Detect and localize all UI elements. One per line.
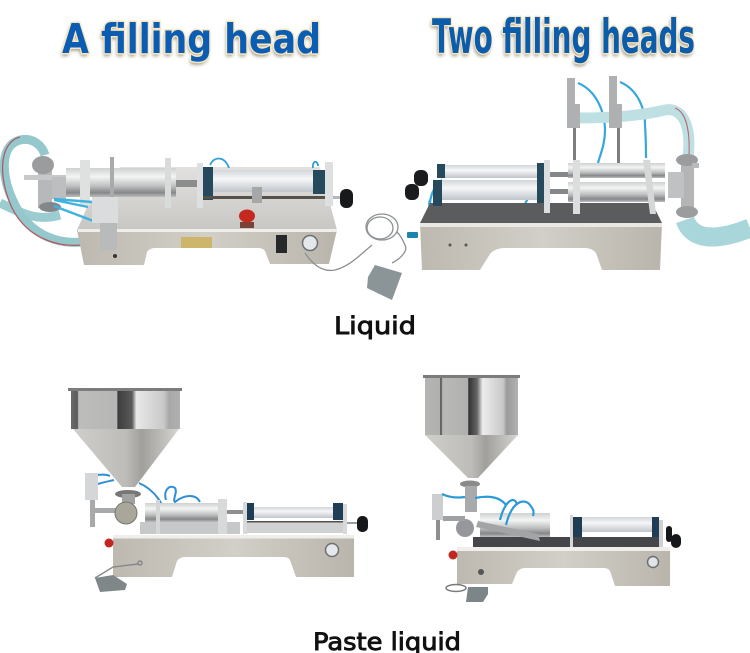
- side nozzle: [85, 473, 119, 527]
- foot pedal: [466, 587, 488, 602]
- nozzle air hoses: [429, 82, 646, 215]
- power switch: [276, 235, 287, 253]
- paste valve: [115, 490, 141, 524]
- pedal cable coil: [446, 584, 466, 592]
- emergency stop: [104, 538, 114, 548]
- lower teal hoses: [685, 220, 750, 237]
- paste cylinder: [140, 499, 243, 534]
- filling nozzle: [54, 197, 118, 258]
- heading: A filling head: A filling head: [62, 15, 321, 63]
- pressure gauge: [302, 236, 318, 250]
- valve block: [668, 154, 699, 218]
- filling nozzles: [567, 76, 622, 164]
- air connector: [478, 569, 484, 575]
- side nozzle: [432, 494, 465, 540]
- angled air cylinder: [476, 521, 540, 541]
- adjustment knobs: [405, 170, 428, 200]
- base cabinet: [77, 230, 337, 265]
- label: Liquid: Liquid: [334, 312, 416, 340]
- pressure gauge: [326, 544, 338, 556]
- foot pedal: [95, 575, 127, 592]
- pressure gauge: [648, 556, 658, 568]
- top plate: [77, 167, 337, 230]
- blue air connector: [407, 232, 418, 238]
- air cylinder: [197, 159, 353, 208]
- air cylinder: [570, 515, 681, 548]
- machine: single head liquid filler: [0, 137, 418, 300]
- hopper: [68, 388, 182, 487]
- heading: A filling head: A filling head: [61, 18, 320, 66]
- dark deck plate: [473, 537, 660, 547]
- rating plate: [181, 237, 212, 248]
- emergency stop: [448, 550, 458, 560]
- upper teal hoses: [578, 108, 689, 157]
- machine: two head liquid filler: [405, 76, 750, 270]
- paste cylinder: [480, 513, 550, 537]
- liquid cylinder: [66, 157, 197, 227]
- valve body: [24, 156, 70, 212]
- air connector and cable: [95, 561, 142, 578]
- machine: two head paste filler: [423, 375, 681, 602]
- air cable and coil: [305, 214, 406, 270]
- emergency stop: [239, 210, 255, 228]
- pneumatic hoses: [97, 475, 200, 520]
- hoses: [0, 137, 93, 245]
- base cabinet: [457, 547, 670, 586]
- base cabinet: [113, 535, 354, 577]
- air cylinders: [433, 160, 568, 213]
- air cylinder: [243, 502, 368, 534]
- foot pedal: [367, 265, 402, 300]
- top plate: [420, 203, 662, 223]
- paste valve: [456, 480, 480, 537]
- hopper: [423, 375, 520, 478]
- base cabinet: [420, 223, 662, 270]
- pneumatic hoses: [442, 494, 534, 525]
- machine: single head paste filler: [68, 388, 368, 592]
- liquid cylinders: [568, 160, 665, 214]
